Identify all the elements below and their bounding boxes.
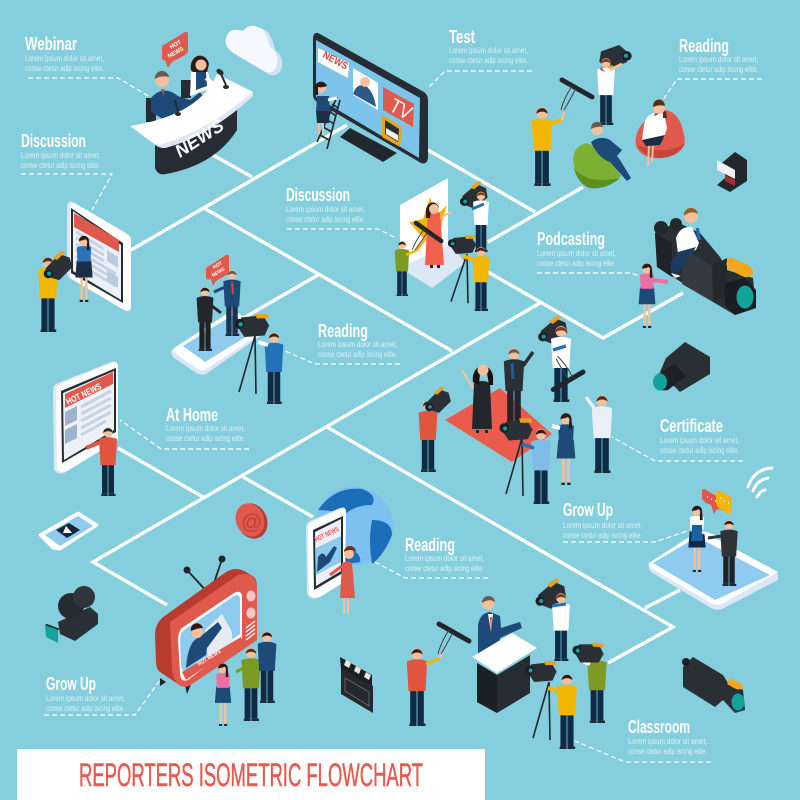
- cameraman white: [457, 180, 489, 252]
- man navy suit: [214, 270, 241, 336]
- interviewer woman navy: [552, 413, 575, 485]
- text block: Podcasting: Podcasting: [537, 229, 605, 249]
- orange mic: [726, 257, 753, 277]
- text block: Webinar: Webinar: [25, 34, 77, 54]
- icon: at sign: @: [241, 511, 262, 534]
- text block: Classroom: Lorem ipsum dolor sit amet,: [628, 737, 707, 746]
- text block: At Home: conse ctetur adip iscing elite.: [166, 434, 245, 443]
- cameraman yellow on tripod: [445, 226, 489, 311]
- woman anchor: [181, 56, 218, 98]
- sitting man: [671, 208, 701, 278]
- bubble: hot news: HOT: [212, 261, 224, 271]
- woman pink: [639, 264, 668, 328]
- text block: Reading centre: conse ctetur adip iscing elite.: [318, 350, 397, 359]
- camcorder body: [655, 222, 756, 315]
- green beanbag: [573, 143, 621, 188]
- ladder: [317, 97, 340, 149]
- text block: Discussion left: conse ctetur adip iscing elite.: [21, 161, 100, 170]
- lectern top: [472, 633, 537, 673]
- TV legs: [160, 678, 192, 694]
- icon: small phone: [40, 513, 97, 549]
- text block: Reading centre: Lorem ipsum dolor sit amet,: [318, 340, 397, 349]
- text block: Podcasting: conse ctetur adip iscing elite.: [537, 259, 616, 268]
- screen building: [205, 614, 232, 660]
- text block: Grow Up right: conse ctetur adip iscing elite.: [563, 531, 642, 540]
- text block: Grow Up left: Grow Up: [46, 674, 96, 694]
- white wall: [400, 178, 448, 268]
- title text: REPORTERS ISOMETRIC FLOWCHART: [79, 757, 423, 793]
- bubble: hot news: [206, 255, 229, 286]
- text block: Reading lower: [405, 535, 484, 573]
- press conference scene: [407, 577, 608, 749]
- text block: Reading top right: Lorem ipsum dolor sit amet,: [679, 55, 758, 64]
- seated man navy: [591, 122, 631, 181]
- news label: NEWS: [321, 50, 350, 72]
- phone: [171, 312, 266, 375]
- text block: Classroom: Classroom: [628, 717, 690, 737]
- phone screen: [183, 315, 257, 362]
- globe: [315, 487, 393, 565]
- bubble: hot news: HOT: [169, 40, 183, 51]
- knobs and grille: [246, 590, 256, 640]
- article rows: [76, 232, 116, 286]
- icon: camera flash: [717, 152, 747, 192]
- man interviewee: [708, 520, 738, 586]
- icon: at sign: [231, 499, 273, 543]
- text block: Certificate: [660, 416, 739, 455]
- at home tablet scene: [53, 362, 118, 496]
- woman red dress: [330, 546, 356, 614]
- headline: HOT NEWS: [314, 526, 340, 544]
- speaker: [478, 596, 522, 655]
- boom man green: [395, 223, 443, 296]
- thumbnails: [107, 250, 118, 288]
- icon: DSLR camera: [653, 342, 710, 392]
- text block: Test: Lorem ipsum dolor sit amet,: [449, 46, 528, 55]
- text block: Webinar: [25, 34, 104, 73]
- text block: Classroom: [628, 717, 707, 756]
- text block: Certificate: Certificate: [660, 416, 723, 436]
- viewer man green: [236, 648, 261, 721]
- label: NEWS: NEWS: [171, 115, 227, 161]
- cameraman yellow on tripod: [522, 651, 577, 749]
- text block: Reading lower: Reading: [405, 535, 455, 555]
- text block: Classroom: conse ctetur adip iscing elite.: [628, 747, 707, 756]
- text block: Grow Up left: [46, 674, 125, 713]
- antennas: [184, 556, 226, 595]
- boom man red: [407, 624, 469, 726]
- tablet body: [67, 202, 131, 311]
- text block: Grow Up left: conse ctetur adip iscing elite.: [46, 704, 125, 713]
- screen: [61, 368, 116, 463]
- carpet: [445, 388, 552, 462]
- tablet screen: [313, 516, 343, 590]
- cameraman white: [535, 314, 571, 402]
- star studio scene: [395, 178, 489, 311]
- woman presenter: [75, 236, 93, 302]
- seated woman: [642, 99, 667, 166]
- cameraman green: [569, 631, 608, 723]
- text block: Test: Test: [449, 27, 475, 47]
- tablet photo: [316, 536, 341, 575]
- text block: Reading centre: Reading: [318, 321, 368, 341]
- text block: Test: [449, 27, 528, 65]
- news desk scene: [130, 32, 253, 174]
- text block: At Home: Lorem ipsum dolor sit amet,: [166, 424, 245, 433]
- seated interview scene: [532, 42, 685, 188]
- viewer woman pink: [215, 663, 231, 726]
- tablet: [306, 508, 346, 598]
- discussion tablet scene: [38, 202, 131, 332]
- cameraman on tripod: [231, 303, 283, 404]
- red beanbag: [636, 110, 685, 158]
- screen band: hot news: [182, 637, 241, 680]
- screen reporter: [186, 622, 222, 668]
- retro TV scene: [155, 556, 276, 726]
- text block: Discussion centre: conse ctetur adip iscing elite.: [286, 215, 365, 224]
- globe and tablet scene: [306, 487, 393, 614]
- tablet: [649, 533, 778, 610]
- floor: [400, 240, 465, 288]
- woman in red dress: [425, 202, 451, 268]
- text block: Discussion centre: Discussion: [286, 185, 350, 205]
- text block: At Home: At Home: [166, 405, 218, 425]
- woman reporter: [688, 506, 717, 572]
- monitor frame: [313, 33, 428, 163]
- text block: Discussion centre: Lorem ipsum dolor sit amet,: [286, 205, 365, 214]
- text block: Webinar: Lorem ipsum dolor sit amet,: [25, 54, 104, 63]
- woman black dress: [462, 364, 493, 433]
- TV label: TV: [386, 95, 416, 125]
- cameraman white top: [597, 42, 633, 125]
- man anchor: [146, 71, 204, 122]
- text block: Reading lower: conse ctetur adip iscing elite.: [405, 564, 484, 573]
- text block: Reading top right: Reading: [679, 36, 729, 56]
- tablet screen: [653, 537, 770, 600]
- cameraman yellow: [38, 249, 75, 332]
- text block: Reading top right: [679, 36, 758, 74]
- TV front: [170, 574, 257, 687]
- icon: clapperboard: [340, 657, 373, 713]
- boom operator yellow: [532, 80, 592, 186]
- text block: Discussion left: [21, 131, 100, 170]
- text block: Reading lower: Lorem ipsum dolor sit amet,: [405, 554, 484, 563]
- red banner: [74, 213, 119, 252]
- article rows: [65, 406, 77, 444]
- screen band: hot news: HOT NEWS: [197, 649, 222, 668]
- text block: At Home: [166, 405, 245, 443]
- clapper card: [382, 115, 402, 147]
- microphones: [175, 68, 229, 116]
- interviewer man grey: [586, 395, 612, 473]
- TV body: [155, 569, 257, 687]
- lectern body: [477, 655, 530, 713]
- banner: hot news: HOT NEWS: [64, 381, 103, 407]
- icon: film camera: [45, 586, 98, 643]
- text block: Certificate: conse ctetur adip iscing elite.: [660, 446, 739, 455]
- text block: Discussion left: Discussion: [21, 131, 86, 151]
- TV screen: [178, 592, 242, 681]
- text block: Grow Up right: [563, 500, 642, 540]
- woman on ladder: [315, 82, 337, 134]
- text block: Reading top right: conse ctetur adip iscing elite.: [679, 65, 758, 74]
- man suit: [504, 348, 533, 426]
- text block: Grow Up right: Grow Up: [563, 500, 613, 520]
- icon: small camcorder: [682, 657, 745, 713]
- flowchart connector lines: [93, 125, 683, 663]
- text block: Grow Up right: Lorem ipsum dolor sit amet,: [563, 521, 642, 530]
- text block: Podcasting: Lorem ipsum dolor sit amet,: [537, 249, 616, 258]
- cameraman blue on tripod: [496, 408, 551, 504]
- bubble: hot news: NEWS: [211, 266, 227, 279]
- monitor stand: [340, 128, 397, 162]
- icon: cloud: [226, 26, 282, 75]
- text block: Discussion centre: [286, 185, 365, 224]
- cameraman white low: [532, 577, 570, 661]
- bubble: hot news: [162, 32, 188, 68]
- text block: Certificate: Lorem ipsum dolor sit amet,: [660, 436, 739, 445]
- man black suit: [197, 287, 221, 351]
- bubble: hot news: NEWS: [167, 46, 185, 60]
- monitor scene: [313, 33, 428, 163]
- text block: Grow Up left: Lorem ipsum dolor sit amet,: [46, 694, 125, 703]
- red carpet scene: [419, 314, 612, 504]
- monitor screen: [316, 40, 420, 158]
- boom over carpet: [542, 356, 584, 398]
- text block: Reading centre: [318, 321, 397, 359]
- text block: Discussion left: Lorem ipsum dolor sit amet,: [21, 151, 100, 160]
- interview tablet scene: [649, 489, 778, 610]
- tablet screen: [71, 208, 123, 303]
- text block: Webinar: conse ctetur adip iscing elite.: [25, 64, 104, 73]
- man red sweater: [86, 427, 117, 496]
- tablet: [53, 362, 118, 474]
- interview phone scene: [171, 255, 283, 404]
- speech bubbles: [702, 489, 732, 515]
- lens: [725, 278, 756, 315]
- icon: wifi: [748, 468, 772, 497]
- reporter red: [419, 385, 453, 472]
- continents: [318, 489, 392, 564]
- portrait card: [353, 68, 378, 110]
- title band: [17, 749, 485, 800]
- text block: Podcasting: [537, 229, 616, 268]
- text block: Test: conse ctetur adip iscing elite.: [449, 56, 528, 65]
- star: [409, 197, 447, 245]
- desk: [130, 74, 253, 174]
- viewer man navy: [258, 632, 276, 703]
- podcast big camcorder scene: [639, 208, 756, 328]
